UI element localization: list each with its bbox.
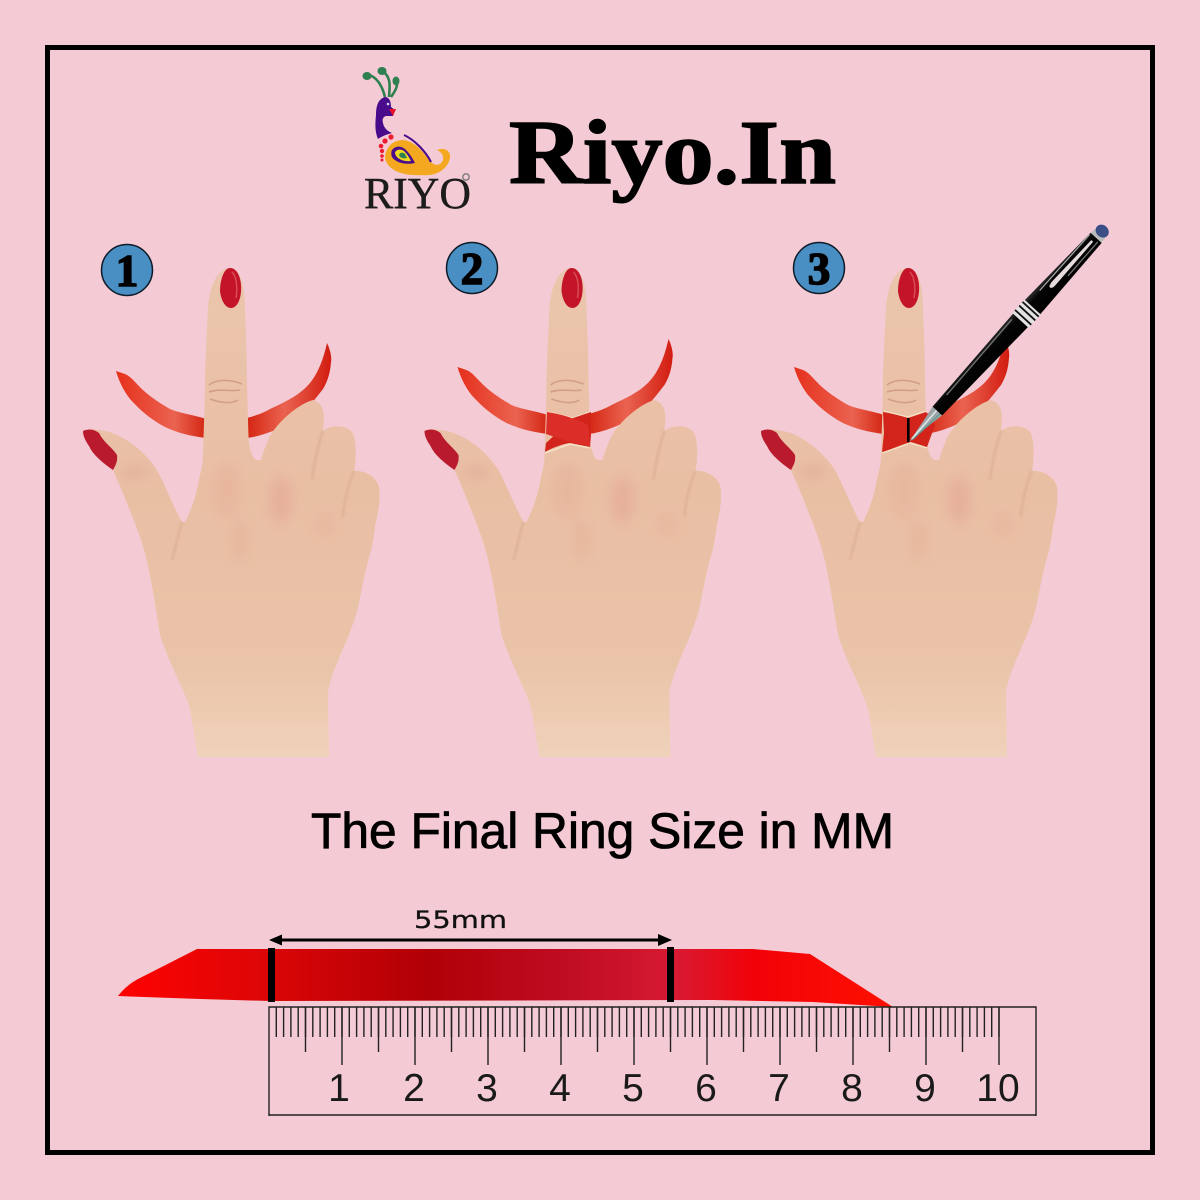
illustration: hand 2 [424,268,721,757]
ruler numbers [328,1067,1020,1110]
ribbon ends: step 2 [458,339,673,434]
ruler numbers: 5 [622,1067,644,1110]
badge: step 1 [102,244,152,296]
tape end mark [667,947,674,1002]
ruler half-centimetre ticks [305,1007,964,1052]
step 1: hand with ribbon behind finger [83,268,379,757]
step 3: hand with marked ribbon and pen [761,219,1114,757]
ribbon crossing: step 2 [545,412,591,453]
badge: step 2 [446,242,498,294]
logo: Riyo peacock: RIYO [364,169,471,218]
step 2: hand with crossed ribbon [424,268,721,757]
badge: step 1: 1 [116,246,138,296]
ruler numbers: 7 [768,1067,790,1110]
ruler [269,1007,1036,1116]
logo: Riyo peacock [362,67,471,218]
badge: step 3: 3 [808,244,830,294]
ribbon ends: step 3 [794,339,1009,434]
measuring tape ribbon [118,949,893,1007]
icon: ballpoint pen [901,219,1114,449]
ribbon crossing: step 3 [882,411,935,453]
illustration: hand 1 [83,268,379,757]
illustration: hand 3 [761,268,1057,757]
ruler centimetre ticks [341,1007,1000,1065]
tape start mark [268,948,275,1002]
dimension label: 55mm: 55mm [414,906,507,934]
badge: step 2: 2 [461,244,483,294]
ruler numbers: 10 [976,1067,1020,1110]
dimension arrow [269,934,672,946]
ruler numbers: 1 [328,1067,350,1110]
ruler numbers: 2 [403,1067,425,1110]
ruler numbers: 6 [695,1067,717,1110]
ribbon pen mark [907,418,910,442]
badge: step 3 [794,242,844,294]
ruler numbers: 8 [841,1067,863,1110]
ruler numbers: 9 [914,1067,936,1110]
ruler numbers: 4 [549,1067,571,1110]
heading: The Final Ring Size in MM: The Final Ring Size in MM [311,803,894,859]
ruler numbers: 3 [476,1067,498,1110]
heading: Riyo.In: Riyo.In [509,102,836,203]
ruler outline [269,1007,1036,1116]
ribbon: step 1 [116,343,331,438]
ruler millimetre ticks [276,1007,1000,1037]
